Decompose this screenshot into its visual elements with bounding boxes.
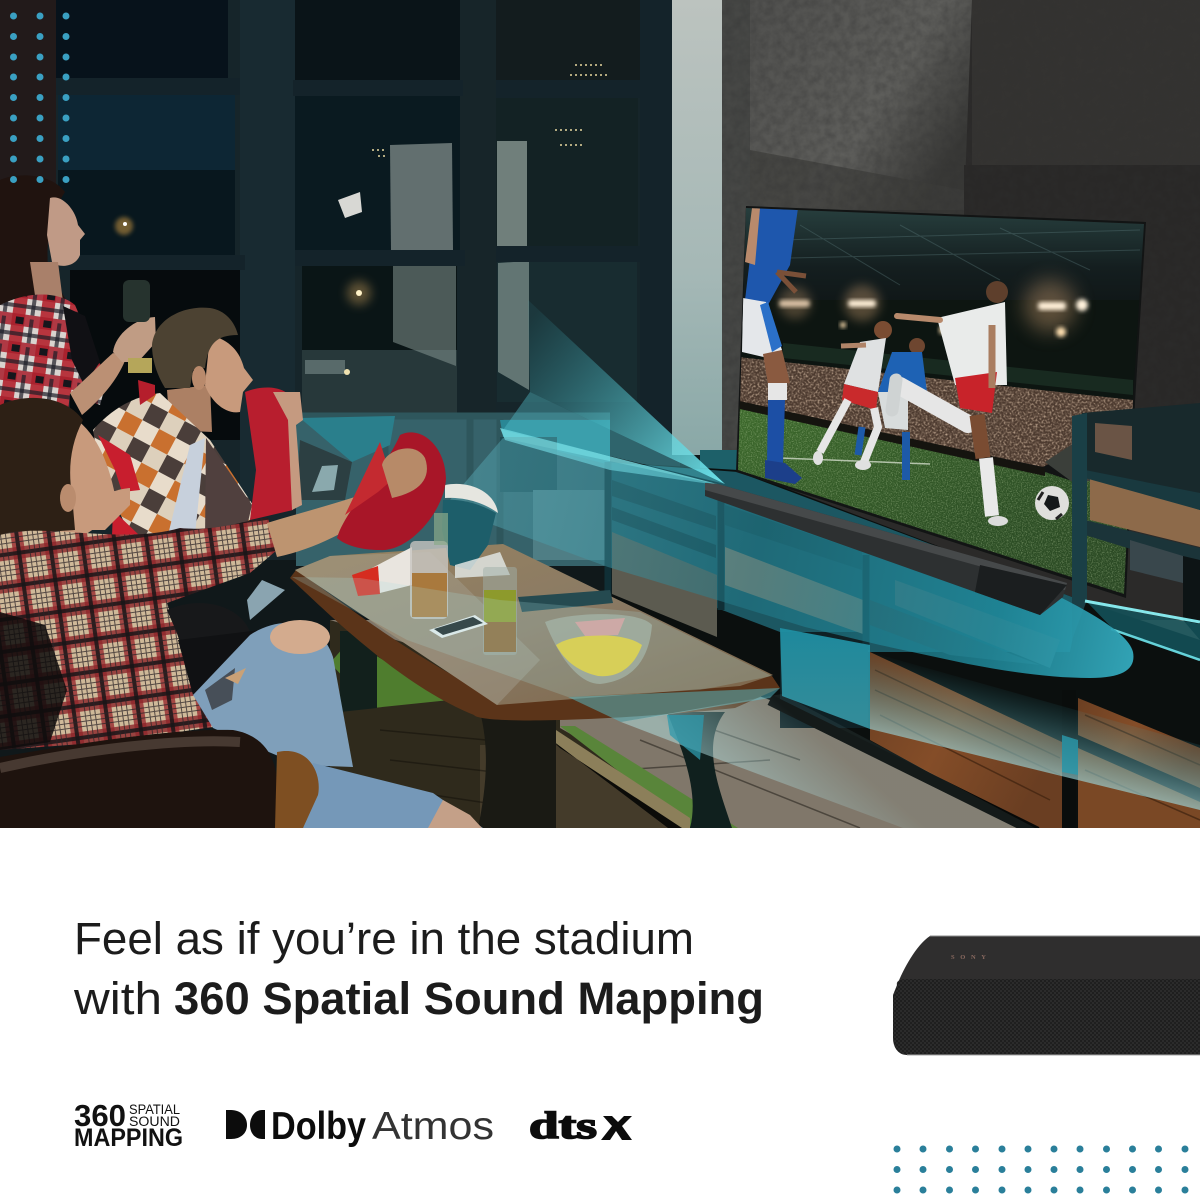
seated fans [0,175,483,828]
soccer ball [1035,486,1069,520]
logo: dts:X: dts [529,1105,597,1147]
player: white and red no.10 [813,321,892,470]
logo: 360 Spatial Sound Mapping: SPATIAL [129,1102,180,1117]
headline [73,913,764,1024]
sound beams [500,300,1200,660]
glass of beer [483,567,517,655]
fan: woman in front [0,398,483,828]
player: white and red no.7 kicking [892,281,1008,526]
floor [330,620,1200,828]
logo: Dolby Atmos [226,1105,494,1148]
soundbar on cabinet [705,483,1067,615]
upper stands [735,300,1140,400]
fan: standing woman [0,175,156,420]
rug grass under table [334,652,444,708]
leather armchair [0,730,319,828]
player: blue centre [858,338,928,480]
city lights [115,65,610,375]
headline: with [73,973,162,1024]
cabinet wood panels [612,532,1200,828]
rug grass strip [560,726,738,828]
TV [735,205,1146,610]
snack bowl [545,614,652,684]
window reflections of the match [338,141,529,390]
logo: Dolby Atmos: Atmos [372,1105,494,1148]
sony wordmark: SONY [951,954,986,961]
decorative dot grid: bottom right [894,1146,1188,1194]
photo scene: living room with stadium match on TV [0,0,1200,832]
teal sound field blade [444,438,1133,678]
logo: 360 Spatial Sound Mapping: 360 [74,1098,126,1133]
concrete wall [722,0,1200,620]
items on table [352,484,652,684]
phone [429,615,488,638]
grass pitch [738,406,1127,594]
player: left foreground blue [742,208,806,484]
megaphone [352,547,412,596]
floodlights [779,280,1088,337]
logo: 360 Spatial Sound Mapping [74,1098,183,1152]
product photo: soundbar [893,936,1200,1055]
logo: 360 Spatial Sound Mapping: SOUND [129,1114,180,1129]
headline: Feel as if you’re in the stadium [74,913,694,964]
window wall [0,0,680,566]
logo: Dolby Atmos: Dolby [271,1105,366,1148]
media cabinet [606,450,1200,832]
logo: dts:X [529,1105,632,1147]
coffee table [290,544,780,828]
teal tinted lower window [296,416,610,566]
logo: 360 Spatial Sound Mapping: MAPPING [74,1124,183,1152]
napkin [455,552,510,578]
lower sound beam haze [292,577,1200,828]
beer bottle glass [410,513,448,619]
side shelf [1072,403,1200,640]
remote [518,590,613,612]
stadium roof [744,208,1144,282]
fan: man [93,308,303,540]
window mullions [393,0,642,266]
pillar [672,0,722,455]
headline: 360 Spatial Sound Mapping [174,973,764,1024]
decorative dot grid: top left [10,12,70,183]
teal tinted hat [442,484,498,570]
crowd [738,357,1133,467]
